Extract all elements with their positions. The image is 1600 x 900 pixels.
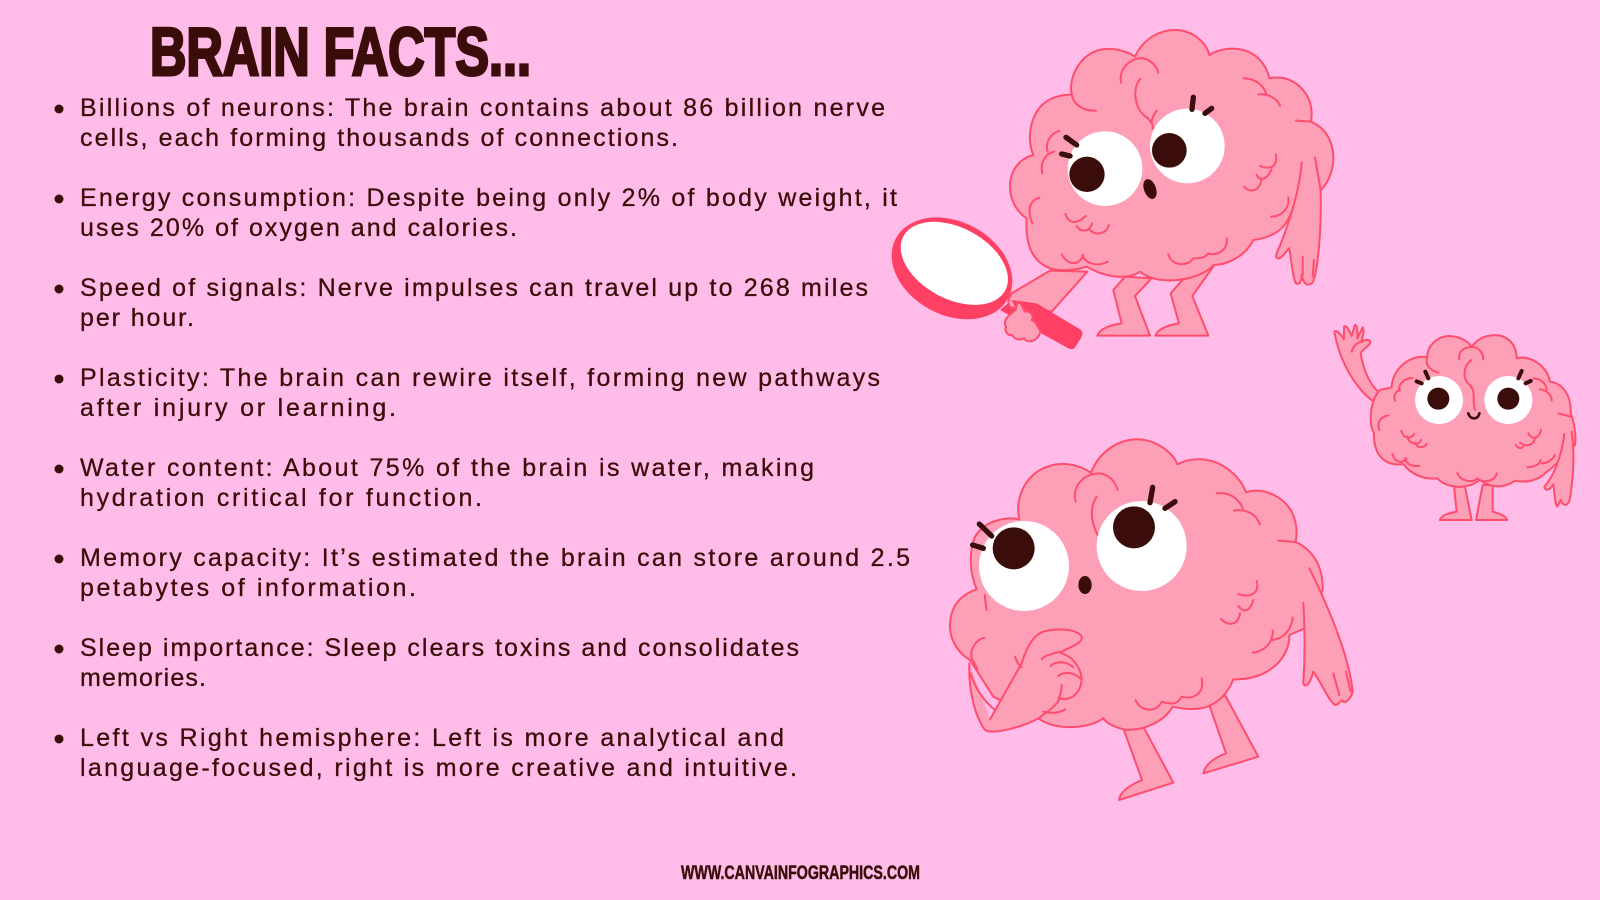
- title: BRAIN FACTS...: [150, 14, 531, 90]
- eyes: [1062, 97, 1225, 206]
- eyes: [973, 487, 1187, 611]
- right arm: [1544, 432, 1573, 507]
- fact: energy: [54, 184, 897, 242]
- fact: speed: Speed of signals: Nerve impulses can travel up to 268 miles: [80, 274, 868, 302]
- fact: plasticity: [54, 364, 880, 422]
- fact: water: Water content: About 75% of the brain is water, making: [80, 454, 814, 482]
- brain body: [950, 439, 1323, 730]
- arm holding glass: [1008, 271, 1087, 312]
- fact: sleep: Sleep importance: Sleep clears toxins and consolidates: [80, 634, 799, 662]
- magnifying glass: [874, 197, 1082, 349]
- legs: [1097, 277, 1152, 336]
- character: waving brain: [1334, 325, 1575, 520]
- footer url: WWW.CANVAINFOGRAPHICS.COM: [681, 863, 920, 884]
- brain folds: [1030, 58, 1312, 264]
- fact: neurons: Billions of neurons: The brain contains about 86 billion nerve: [80, 94, 885, 122]
- fact: sleep: memories.: [80, 664, 206, 692]
- smile: [1468, 413, 1479, 418]
- brain body: [1371, 335, 1575, 487]
- fact: memory: Memory capacity: It’s estimated the brain can store around 2.5: [80, 544, 910, 572]
- legs: [1119, 727, 1173, 800]
- fact: hemispheres: Left vs Right hemisphere: Left is more analytical and: [80, 724, 784, 752]
- right arm: [1303, 568, 1353, 705]
- hand: [1005, 303, 1041, 341]
- brain folds: [1378, 347, 1571, 481]
- right arm: [1276, 158, 1321, 285]
- brain body: [1010, 30, 1333, 280]
- waving arm: [1334, 325, 1379, 403]
- legs: [1440, 487, 1472, 520]
- hand on chin: [969, 630, 1082, 732]
- fact: hemispheres: [54, 724, 797, 782]
- fact: plasticity: Plasticity: The brain can rewire itself, forming new pathways: [80, 364, 880, 392]
- mouth: [1078, 576, 1092, 594]
- fact list: [54, 94, 910, 782]
- fact: neurons: [54, 94, 885, 152]
- fact: sleep: [54, 634, 799, 692]
- fact: energy: uses 20% of oxygen and calories.: [80, 214, 517, 242]
- character: thinking brain: [950, 439, 1353, 800]
- fact: neurons: cells, each forming thousands of connections.: [80, 124, 678, 152]
- fact: energy: Energy consumption: Despite being only 2% of body weight, it: [80, 184, 897, 212]
- fact: memory: [54, 544, 910, 602]
- character: brain with magnifying glass: [874, 30, 1333, 349]
- brain folds: [971, 473, 1296, 710]
- fact: water: hydration critical for function.: [80, 484, 482, 512]
- fact: hemispheres: language-focused, right is more creative and intuitive.: [80, 754, 797, 782]
- fact: plasticity: after injury or learning.: [80, 394, 396, 422]
- eyes: [1415, 371, 1532, 424]
- fact: water: [54, 454, 814, 512]
- fact: speed: per hour.: [80, 304, 194, 332]
- mouth: [1141, 177, 1159, 201]
- fact: memory: petabytes of information.: [80, 574, 416, 602]
- fact: speed: [54, 274, 868, 332]
